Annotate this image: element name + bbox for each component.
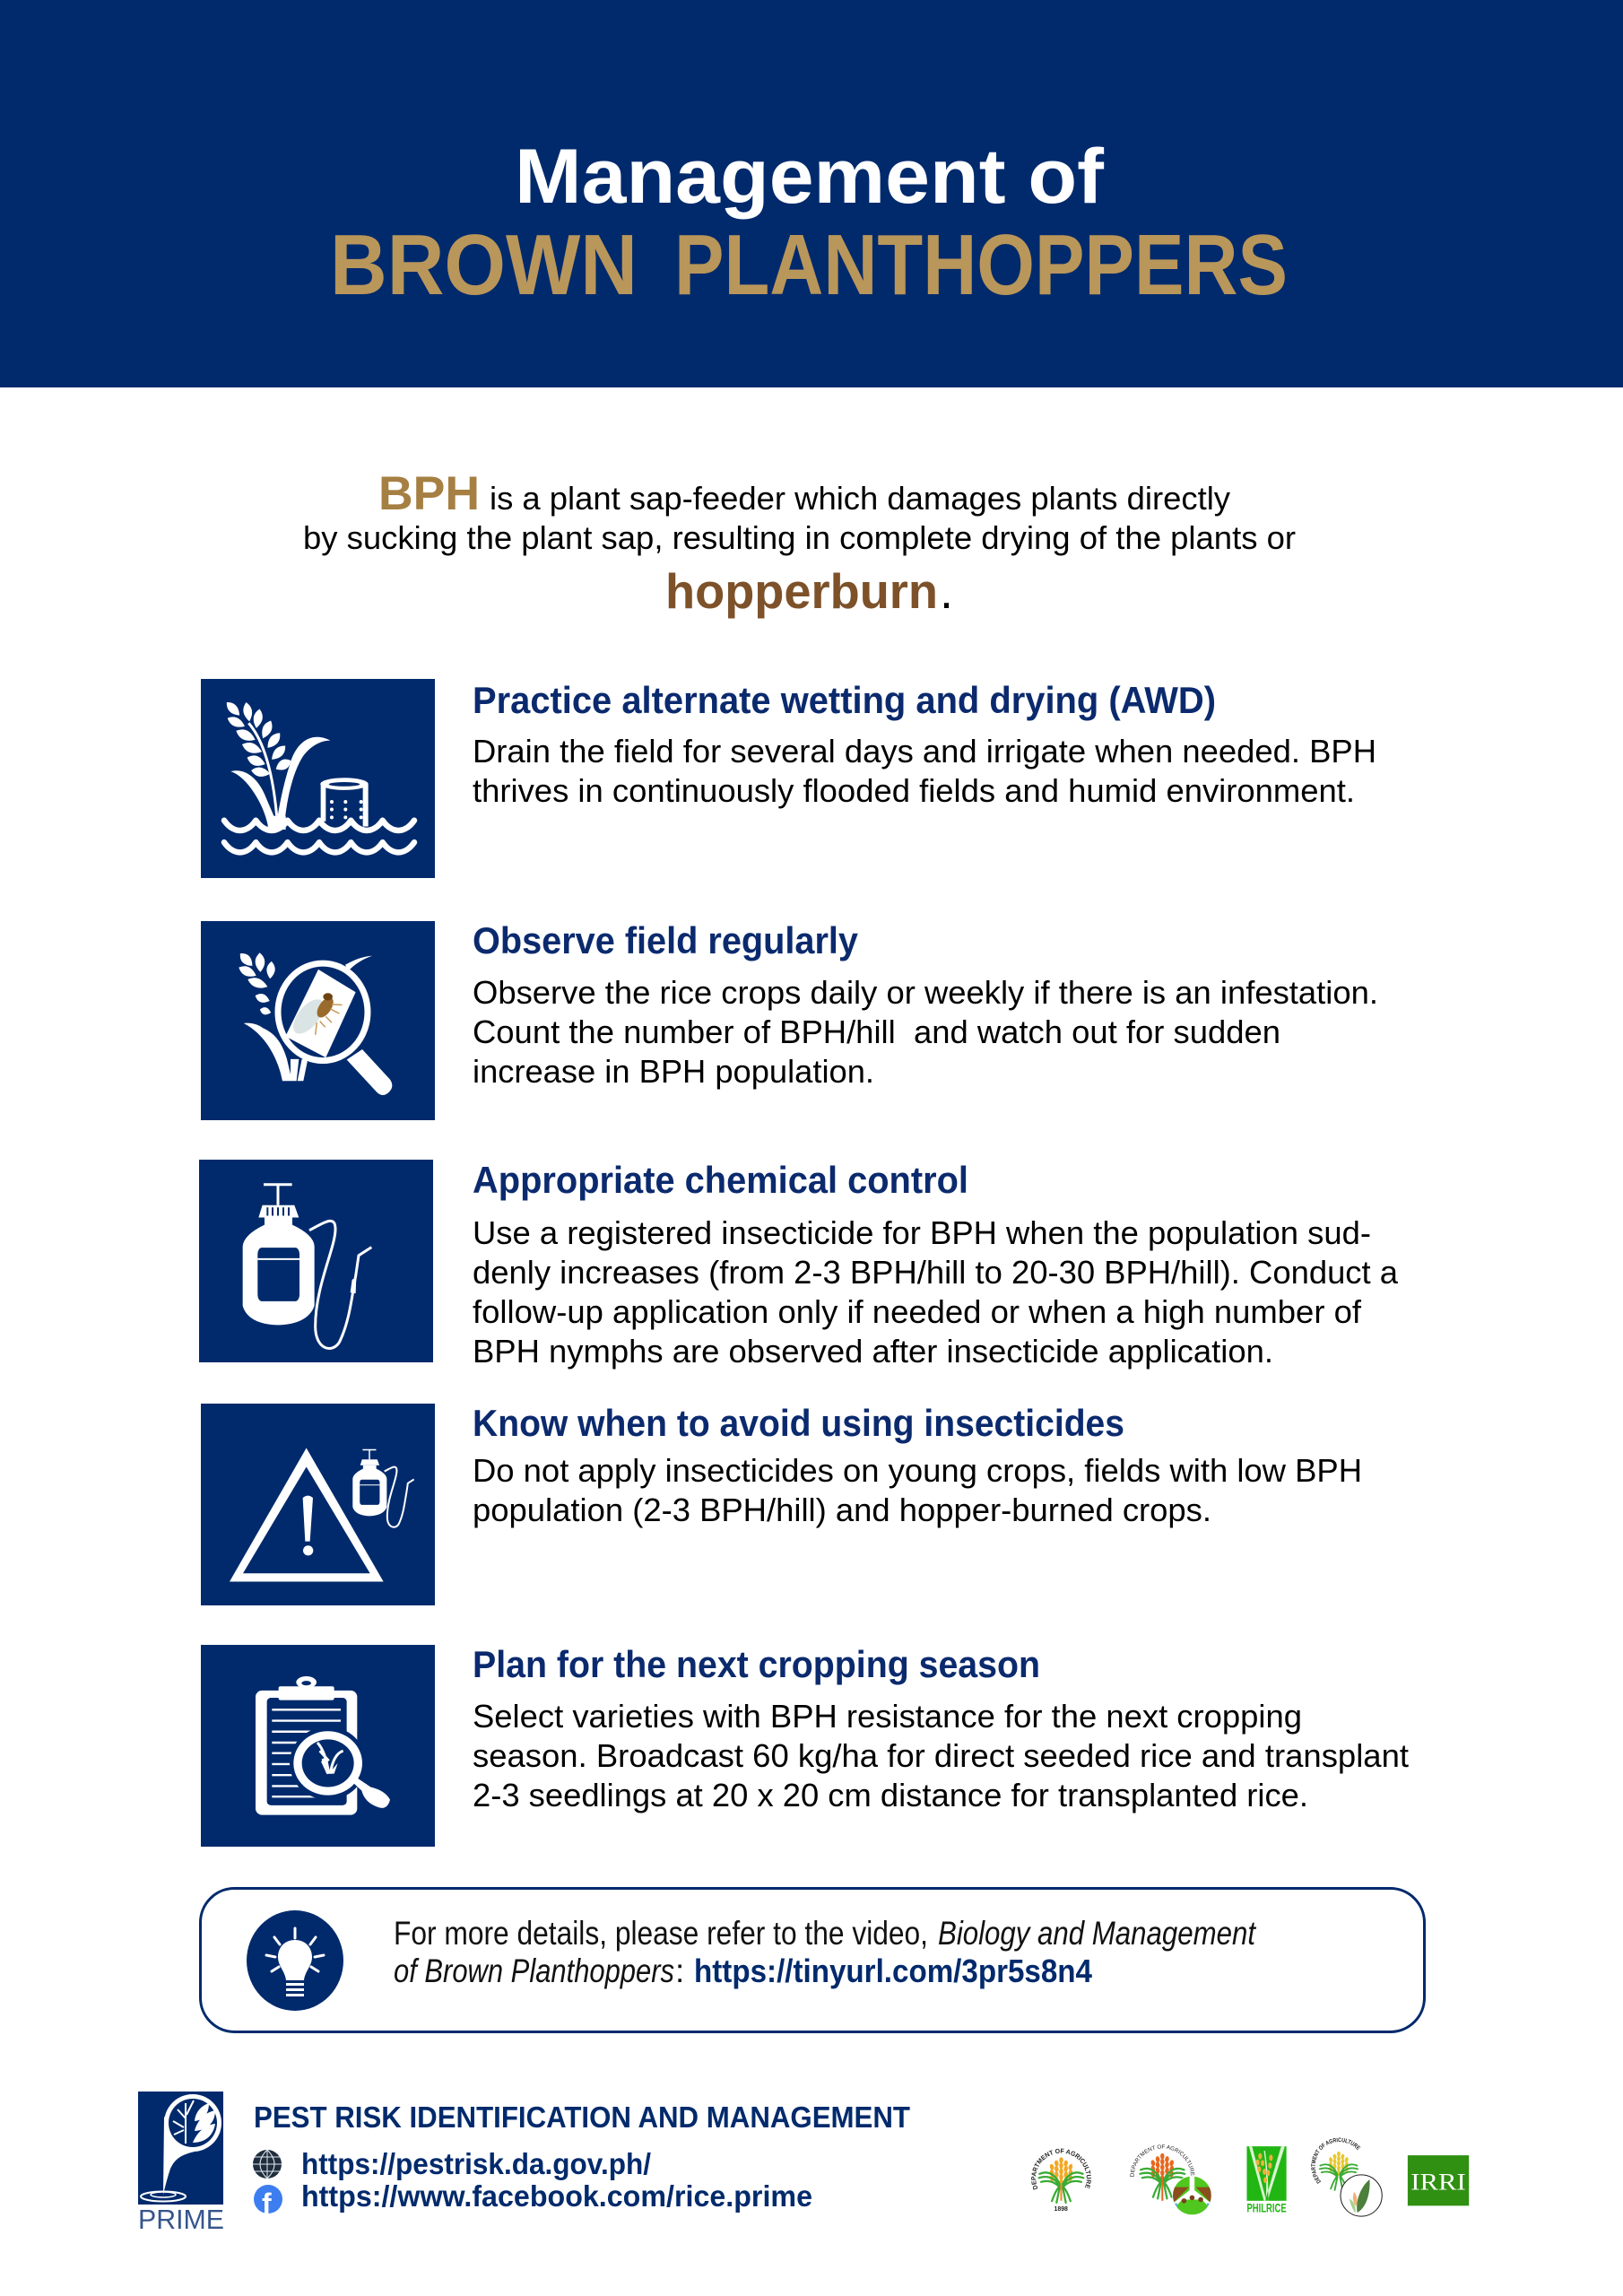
logo: IRRI: [1408, 2155, 1469, 2205]
icon: rice plant, field water tube and waves: [201, 679, 435, 878]
logo: PhilRice: PHILRICE: [1246, 2201, 1287, 2214]
footer: partner logos: [1031, 2138, 1469, 2217]
callout text: [394, 1915, 1256, 1989]
logo: Department of Agriculture: DEPARTMENT OF AGRICULTURE: [1031, 2149, 1091, 2190]
body text: AWD: [473, 733, 1376, 809]
title line: Brown Planthoppers: [330, 217, 1288, 313]
body text: avoid: population (2-3 BPH/hill) and hopper-burned crops.: [473, 1492, 1211, 1528]
header banner: [0, 0, 1623, 387]
icon: light bulb: [247, 1910, 343, 2011]
body text: observe: [473, 974, 1378, 1090]
body text: plan: season. Broadcast 60 kg/ha for direct seeded rice and transplant: [473, 1737, 1409, 1774]
body text: plan: Select varieties with BPH resistance for the next cropping: [473, 1698, 1302, 1735]
logo: IRRI: IRRI: [1410, 2168, 1466, 2195]
callout: more details: [201, 1889, 1424, 2032]
panel: plan next season: [201, 1643, 1409, 1847]
footer: facebook link: https://www.facebook.com/rice.prime: [301, 2179, 812, 2213]
footer: facebook link: f: [262, 2187, 272, 2220]
heading: plan: Plan for the next cropping season: [473, 1643, 1040, 1685]
title line: Brown Planthoppers: BROWN: [330, 217, 638, 313]
logo: DA soil and water unit: DEPARTMENT OF AGRICULTURE: [1130, 2144, 1194, 2177]
body text: observe: Observe the rice crops daily or weekly if there is an infestation.: [473, 974, 1378, 1011]
logo: Department of Agriculture: [1031, 2149, 1091, 2213]
intro paragraph: is a plant sap-feeder which damages plants directly: [490, 480, 1231, 517]
icon: warning triangle with sprayer: [201, 1404, 435, 1605]
callout text: Biology and Management: [938, 1915, 1256, 1952]
logo: Department of Agriculture: 1898: [1055, 2206, 1068, 2213]
icon: clipboard with magnifier and rice: [201, 1645, 435, 1847]
intro paragraph: BPH: [378, 467, 480, 520]
logo: DA soil and water unit: [1130, 2144, 1211, 2215]
intro paragraph: by sucking the plant sap, resulting in complete drying of the plants or: [303, 519, 1296, 556]
panel: when to avoid insecticides: [201, 1402, 1362, 1605]
footer: organisation heading: PEST RISK IDENTIFICATION AND MANAGEMENT: [254, 2100, 910, 2134]
logo: DA plant unit: DEPARTMENT OF AGRICULTURE: [1311, 2138, 1361, 2184]
body text: observe: Count the number of BPH/hill and watch out for sudden: [473, 1013, 1280, 1050]
callout text: of Brown Planthoppers: [394, 1952, 674, 1989]
heading: observe: Observe field regularly: [473, 919, 859, 961]
body text: observe: increase in BPH population.: [473, 1053, 874, 1090]
intro paragraph: .: [940, 565, 953, 619]
title line: Brown Planthoppers: PLANTHOPPERS: [674, 217, 1288, 313]
footer: PRIME logo: [138, 2092, 224, 2235]
panel: observe field: [201, 919, 1378, 1120]
body text: chemical: [473, 1214, 1399, 1370]
intro paragraph: hopperburn: [665, 563, 938, 619]
body text: chemical: Use a registered insecticide for BPH when the population sud-: [473, 1214, 1371, 1251]
body text: avoid: [473, 1452, 1362, 1528]
callout text: https://tinyurl.com/3pr5s8n4: [694, 1952, 1092, 1989]
body text: chemical: denly increases (from 2-3 BPH/hill to 20-30 BPH/hill). Conduct a: [473, 1254, 1399, 1291]
logo: PhilRice: [1246, 2146, 1287, 2214]
footer: PRIME logo: PRIME: [138, 2204, 224, 2235]
title line: Management of: Management of: [515, 134, 1104, 220]
callout text: For more details, please refer to the video,: [394, 1915, 928, 1952]
footer: website link: https://pestrisk.da.gov.ph/: [301, 2147, 651, 2180]
heading: avoid: Know when to avoid using insecticides: [473, 1402, 1124, 1444]
heading: AWD: Practice alternate wetting and drying (AWD): [473, 679, 1216, 721]
body text: chemical: follow-up application only if needed or when a high number of: [473, 1293, 1362, 1330]
icon: magnifier over rice plant with planthopper: [201, 921, 435, 1120]
logo: DA plant unit: [1311, 2138, 1383, 2217]
body text: plan: [473, 1698, 1409, 1813]
body text: chemical: BPH nymphs are observed after insecticide application.: [473, 1333, 1273, 1370]
panel: alternate wetting and drying: [201, 679, 1376, 878]
body text: plan: 2-3 seedlings at 20 x 20 cm distance for transplanted rice.: [473, 1777, 1308, 1813]
body text: AWD: thrives in continuously flooded fields and humid environment.: [473, 772, 1355, 809]
panel: chemical control: [199, 1159, 1399, 1370]
intro paragraph: [303, 467, 1296, 619]
callout text: :: [675, 1952, 684, 1989]
body text: AWD: Drain the field for several days and irrigate when needed. BPH: [473, 733, 1376, 770]
icon: knapsack sprayer: [199, 1160, 433, 1362]
body text: avoid: Do not apply insecticides on young crops, fields with low BPH: [473, 1452, 1362, 1489]
heading: chemical: Appropriate chemical control: [473, 1159, 968, 1201]
